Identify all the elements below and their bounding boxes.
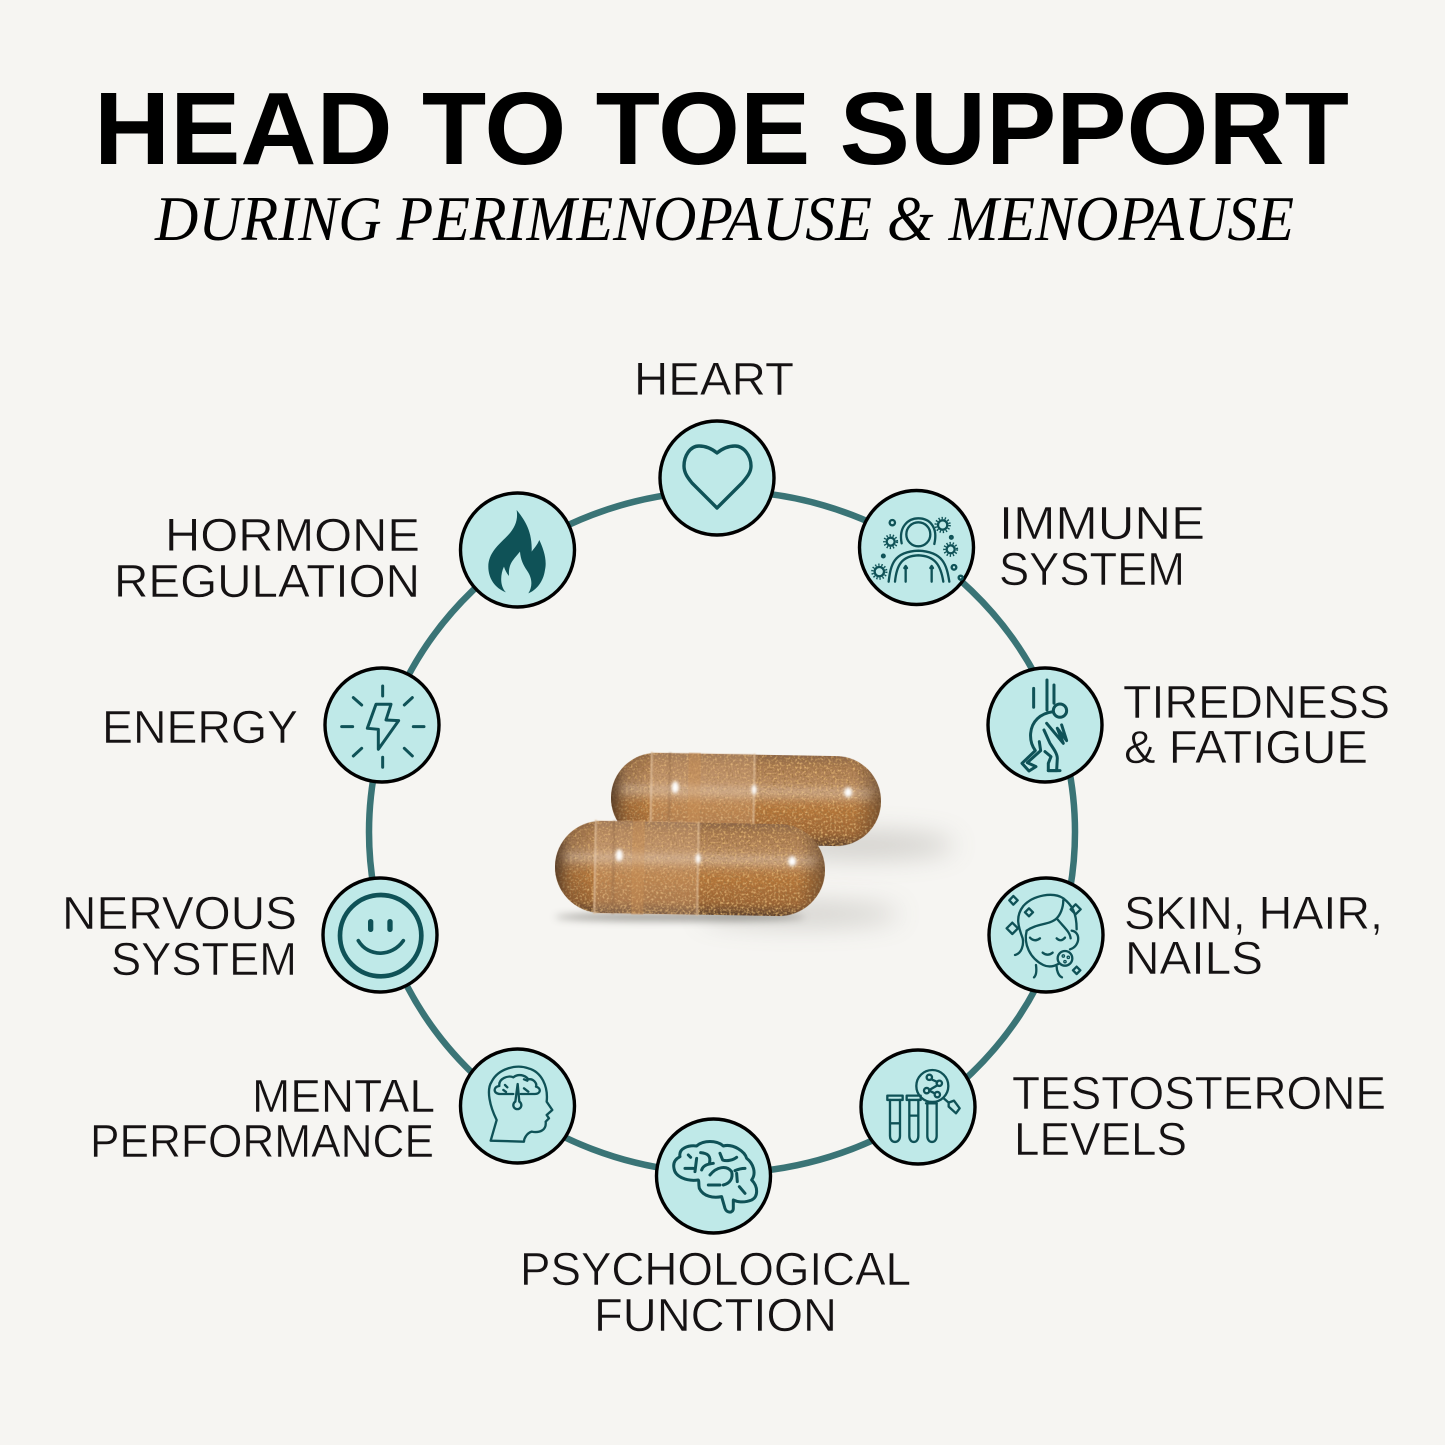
capsules xyxy=(554,751,955,925)
node: heart xyxy=(660,421,774,535)
label: nervous system xyxy=(62,887,297,985)
icon: tired figure xyxy=(1022,680,1067,771)
label: tiredness and fatigue: & FATIGUE xyxy=(1124,721,1368,773)
label: testosterone levels: LEVELS xyxy=(1014,1113,1187,1165)
label: psychological function: PSYCHOLOGICAL xyxy=(520,1243,911,1295)
capsule shadows xyxy=(555,832,955,925)
icon: brain xyxy=(674,1141,757,1212)
label: energy: ENERGY xyxy=(102,701,298,753)
icon: heart xyxy=(684,446,751,508)
label: skin hair nails: SKIN, HAIR, xyxy=(1124,887,1383,939)
node: skin hair nails xyxy=(989,878,1103,992)
node: tiredness and fatigue xyxy=(988,668,1102,782)
label: hormone regulation: HORMONE xyxy=(165,509,420,561)
ring connecting the benefits xyxy=(369,491,1075,1173)
label: tiredness and fatigue xyxy=(1123,676,1390,773)
node: mental performance xyxy=(460,1049,574,1163)
label: skin hair nails: NAILS xyxy=(1125,932,1263,984)
label: immune system: IMMUNE xyxy=(999,497,1205,549)
label: psychological function xyxy=(520,1243,911,1341)
label: psychological function: FUNCTION xyxy=(594,1289,837,1341)
label: nervous system: NERVOUS xyxy=(62,887,297,939)
icon: test tubes and magnifier xyxy=(887,1070,960,1142)
front capsule xyxy=(554,819,826,918)
back capsule xyxy=(610,751,882,848)
label: mental performance: PERFORMANCE xyxy=(90,1115,434,1167)
label: immune system xyxy=(999,497,1205,595)
icon: smiley face xyxy=(340,895,421,976)
title: HEAD TO TOE SUPPORT xyxy=(94,71,1349,186)
label: hormone regulation xyxy=(114,509,420,607)
node: testosterone levels xyxy=(861,1050,975,1164)
node: nervous system xyxy=(323,878,437,992)
node: hormone regulation xyxy=(460,493,574,607)
node: immune system xyxy=(860,490,974,604)
label: skin hair nails xyxy=(1124,887,1383,984)
icon: person surrounded by germs xyxy=(872,518,963,582)
label: nervous system: SYSTEM xyxy=(111,933,297,985)
label: immune system: SYSTEM xyxy=(999,543,1185,595)
icon: flame xyxy=(488,510,546,593)
icon: head with brain gauge xyxy=(489,1067,552,1142)
label: mental performance xyxy=(90,1070,435,1167)
icon: woman's face with sparkles xyxy=(1007,895,1081,977)
label: hormone regulation: REGULATION xyxy=(114,555,420,607)
node: psychological function xyxy=(656,1119,770,1233)
node: energy xyxy=(325,668,439,782)
label: testosterone levels xyxy=(1012,1067,1386,1165)
subtitle: DURING PERIMENOPAUSE & MENOPAUSE xyxy=(154,183,1294,254)
label: mental performance: MENTAL xyxy=(252,1070,435,1122)
label: tiredness and fatigue: TIREDNESS xyxy=(1123,676,1390,728)
label: testosterone levels: TESTOSTERONE xyxy=(1012,1067,1386,1119)
label: heart: HEART xyxy=(634,353,794,405)
icon: lightning bolt with rays xyxy=(342,686,424,767)
